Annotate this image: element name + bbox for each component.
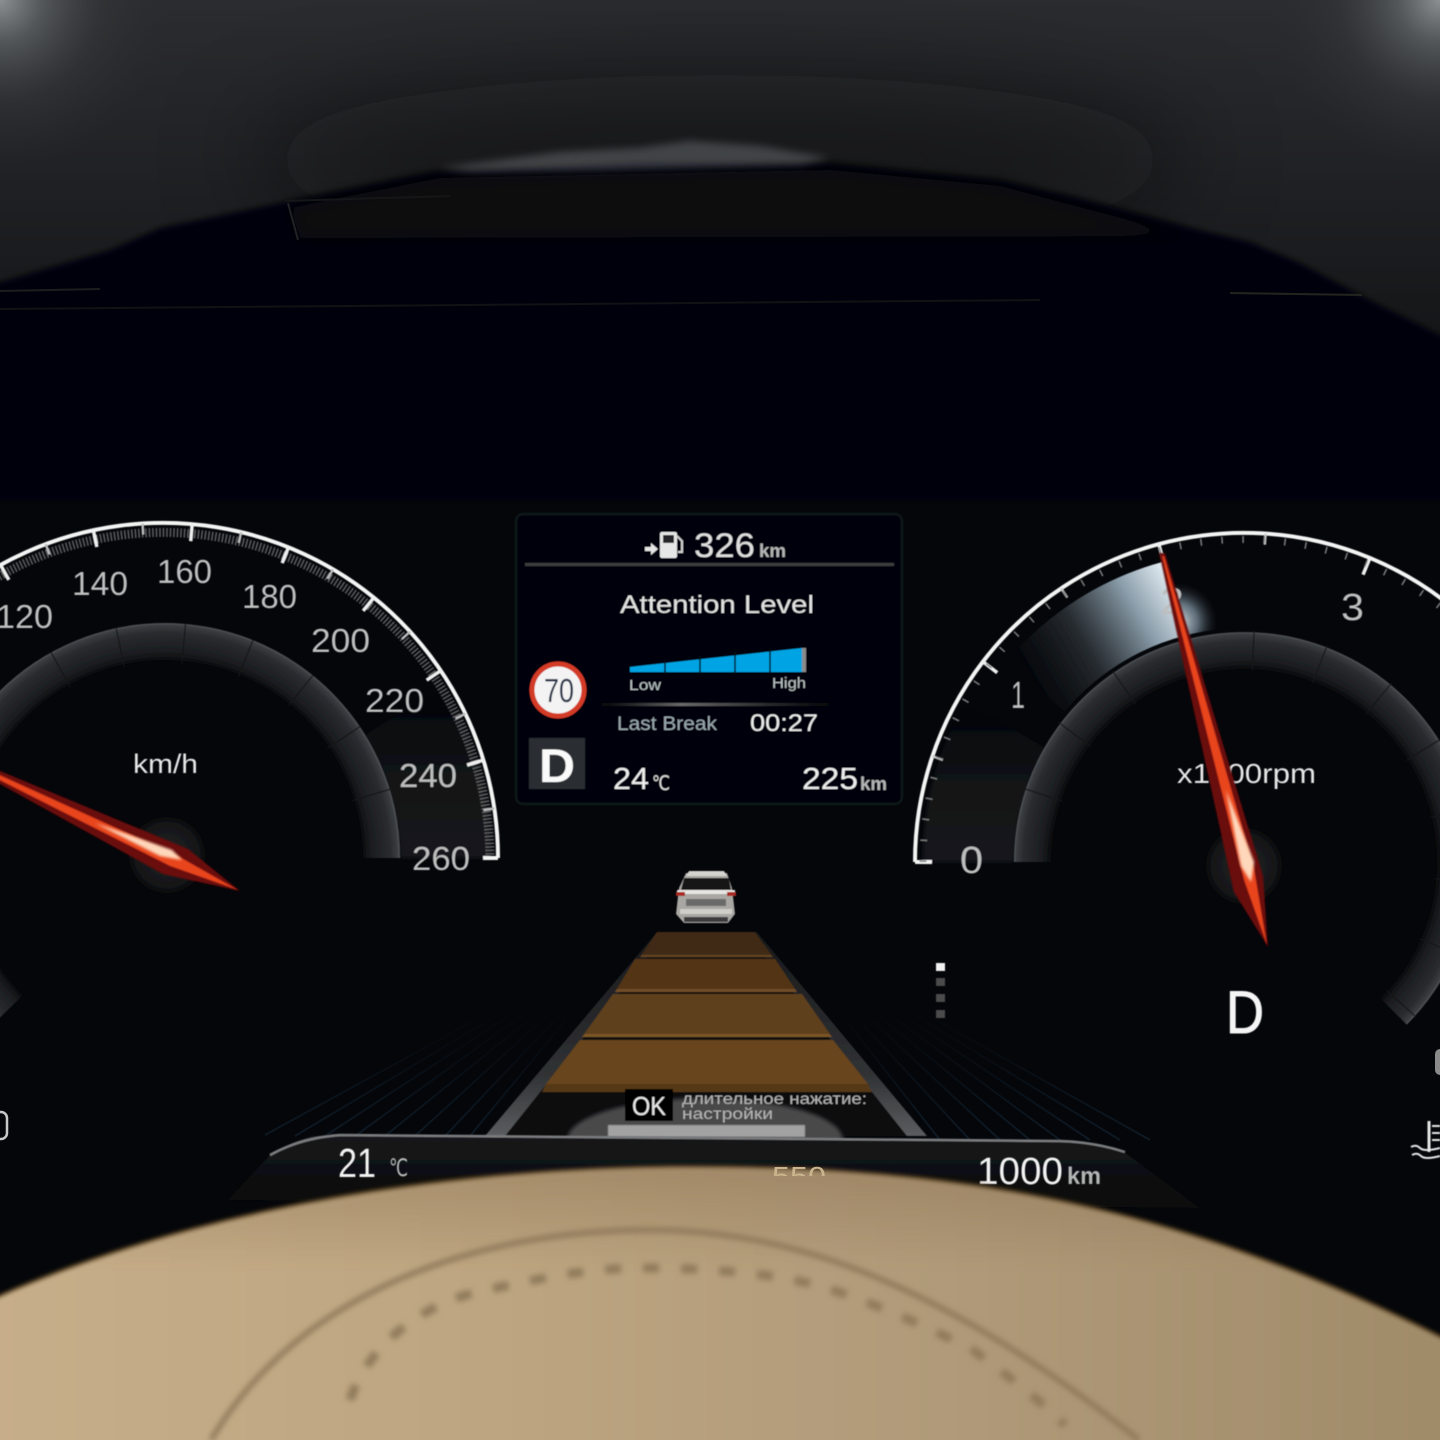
lane section 4	[546, 1040, 868, 1084]
wheel seam	[211, 1230, 1139, 1440]
panel: tachometer gauge	[915, 533, 1440, 1046]
speedometer inner band	[0, 624, 390, 1008]
lane section 1 lip	[640, 955, 773, 957]
speed limit sign: 70	[544, 672, 574, 709]
lane section 3 lip	[582, 1034, 832, 1037]
gear letter D: D	[1226, 979, 1264, 1046]
tachometer hub	[1206, 828, 1282, 904]
tachometer highlight sector	[1006, 552, 1224, 712]
lane section 3	[582, 994, 832, 1037]
tachometer labels: 3	[1341, 587, 1364, 629]
attention bar high label: High	[772, 675, 806, 692]
fuel range value	[694, 527, 786, 565]
lane section 1	[640, 932, 773, 957]
temperature readout: ℃	[652, 773, 670, 795]
top divider	[525, 563, 894, 566]
speedometer scale arc and ticks	[0, 523, 498, 858]
speedometer labels: 200	[311, 622, 370, 659]
fuel range value: 326	[694, 527, 755, 565]
last break value: 00:27	[750, 710, 818, 737]
trip distance readout: km	[860, 774, 887, 794]
speedometer unit: km/h	[133, 749, 198, 779]
temperature readout	[613, 761, 670, 796]
outdoor temperature: 21	[338, 1140, 376, 1186]
speedometer brushed glow	[365, 686, 490, 858]
total distance	[977, 1151, 1101, 1193]
drive mode box: D	[539, 739, 575, 792]
long-press hint text: длительное нажатие:	[682, 1091, 867, 1108]
lower trip bar	[228, 1135, 1200, 1208]
trip distance readout: 225	[802, 761, 858, 796]
panel: speedometer gauge	[0, 523, 498, 1008]
tachometer brushed glow	[923, 700, 1045, 862]
headlight beam	[567, 1098, 843, 1182]
outdoor temperature: ℃	[389, 1155, 408, 1182]
speedometer labels	[0, 553, 470, 877]
partly hidden readout at wheel edge: 550	[772, 1161, 826, 1192]
trip distance readout	[802, 761, 887, 796]
speed limit sign	[532, 664, 584, 716]
road surface	[505, 932, 907, 1136]
speedometer labels: 240	[399, 757, 457, 794]
total distance: 1000	[977, 1151, 1063, 1193]
tachometer labels: 0	[960, 840, 983, 882]
speedometer labels: 160	[157, 553, 212, 590]
fading divider	[600, 703, 832, 706]
tachometer unit: x1000rpm	[1177, 758, 1316, 789]
speedometer labels: 140	[72, 565, 128, 602]
panel: central info display	[516, 514, 902, 804]
total distance: km	[1067, 1163, 1101, 1190]
speedometer labels: 180	[242, 578, 297, 615]
tachometer needle	[1159, 553, 1268, 947]
speedometer needle	[0, 746, 240, 891]
long-press hint text: настройки	[682, 1106, 773, 1123]
attention bar low label: Low	[629, 677, 661, 694]
dashboard hood at top	[0, 0, 1440, 500]
OK button: OK	[632, 1091, 667, 1121]
gear indicator dots	[936, 963, 945, 1018]
last break label: Last Break	[617, 714, 718, 735]
lane section 4 lip	[542, 1084, 872, 1092]
lane section 2	[615, 959, 797, 992]
tachometer labels	[960, 581, 1364, 882]
left road rail	[485, 932, 668, 1136]
speedometer hub	[129, 817, 205, 893]
wheel stitching	[350, 1268, 1065, 1425]
tachometer labels: 1	[1011, 675, 1025, 717]
lane section 2 lip	[615, 989, 797, 992]
temperature readout: 24	[613, 761, 649, 796]
attention level bar	[630, 648, 806, 673]
fuel range value: km	[759, 541, 786, 561]
drive mode box	[529, 738, 585, 792]
speedometer labels: 260	[412, 840, 470, 877]
fuel range icon	[645, 532, 682, 558]
long-press hint text	[682, 1091, 867, 1123]
attention level heading: Attention Level	[620, 591, 814, 619]
icon: coolant temperature	[1411, 1121, 1440, 1158]
outdoor temperature	[338, 1140, 408, 1186]
vehicle rear view	[676, 871, 736, 923]
tachometer labels: 2	[1160, 581, 1184, 623]
tachometer scale arc and ticks	[915, 533, 1440, 862]
road graphic	[485, 871, 927, 1182]
steering wheel hub	[0, 1165, 1440, 1440]
icon: left edge warning	[0, 1112, 7, 1139]
side stripes beside road	[265, 930, 1150, 1140]
tachometer inner band	[1024, 630, 1440, 1017]
speedometer labels: 220	[365, 682, 424, 719]
right road rail	[745, 932, 927, 1136]
icon: right edge warning	[1435, 1049, 1440, 1075]
